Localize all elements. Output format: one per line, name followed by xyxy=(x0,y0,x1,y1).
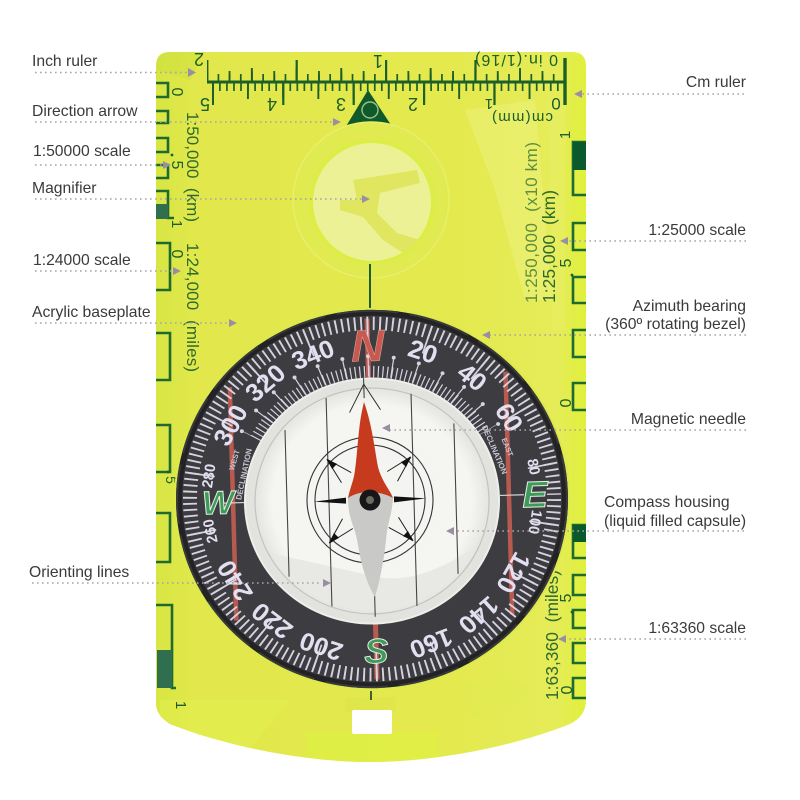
right map scales: 1:250,000, 1:25,000 and 1:63,360: 1:250,000 (x10 km) xyxy=(522,142,541,303)
cardinal letters: E xyxy=(522,473,549,515)
label: Direction arrow: Direction arrow xyxy=(32,103,138,120)
label: Cm ruler xyxy=(574,74,746,98)
label: 1:50000 scale xyxy=(33,143,171,169)
label: 1:50000 scale: 1:50000 scale xyxy=(33,143,131,160)
label: Magnifier: Magnifier xyxy=(32,180,97,197)
left map scales: 1:50,000 and 1:24,000: 1 xyxy=(168,220,185,228)
panel: acrylic baseplate xyxy=(156,52,586,762)
label: Acrylic baseplate: Acrylic baseplate xyxy=(32,304,151,321)
bezel degree numbers: 120 xyxy=(490,547,536,597)
bezel degree numbers: 220 xyxy=(247,596,298,644)
right map scales: 1:250,000, 1:25,000 and 1:63,360: 1:63,360 (miles) xyxy=(542,570,562,700)
inch ruler and cm ruler: 4 xyxy=(267,94,277,114)
inch ruler and cm ruler: 2 xyxy=(408,94,418,114)
inch ruler and cm ruler: 1 xyxy=(373,51,383,71)
label: 1:25000 scale: 1:25000 scale xyxy=(648,222,746,239)
bezel degree numbers: 60 xyxy=(489,399,528,437)
cardinal letters: S xyxy=(364,632,389,671)
label: Compass housing xyxy=(446,494,746,535)
notch xyxy=(352,710,392,734)
left map scales: 1:50,000 and 1:24,000: 5 xyxy=(163,476,179,484)
bezel degree numbers: 340 xyxy=(288,335,339,376)
right map scales: 1:250,000, 1:25,000 and 1:63,360: 5 xyxy=(558,258,575,267)
left map scales: 1:50,000 and 1:24,000: 5 xyxy=(168,161,185,170)
declination text: DECLINATION xyxy=(234,447,254,501)
compass rose xyxy=(304,376,435,565)
red declination lines xyxy=(228,315,514,683)
declination text: DECLINATION xyxy=(480,424,509,476)
bezel degree numbers: 240 xyxy=(212,555,259,605)
inch ruler and cm ruler: cm(mm) xyxy=(492,109,553,126)
left map scales: 1:50,000 and 1:24,000: 1:50,000 (km) xyxy=(183,112,202,222)
label: 1:24000 scale: 1:24000 scale xyxy=(33,252,131,269)
right map scales: 1:250,000, 1:25,000 and 1:63,360: 5 xyxy=(558,593,575,602)
inch ruler and cm ruler xyxy=(194,49,566,126)
cardinal letters: W xyxy=(202,485,237,522)
inch ruler and cm ruler: 1 xyxy=(485,95,493,112)
label: Magnetic needle: Magnetic needle xyxy=(631,411,746,428)
label: 1:25000 scale xyxy=(560,222,746,245)
right map scales: 1:250,000, 1:25,000 and 1:63,360: 1 xyxy=(557,131,574,139)
label: 1:24000 scale xyxy=(33,252,181,275)
declination text: EAST xyxy=(499,437,515,458)
declination text xyxy=(226,423,517,501)
label: Azimuth bearing: Azimuth bearing xyxy=(633,298,746,315)
label: 1:63360 scale xyxy=(558,620,746,643)
bezel degree numbers: 100 xyxy=(524,509,544,535)
label: Magnifier xyxy=(32,180,370,203)
label: Cm ruler: Cm ruler xyxy=(686,74,746,91)
declination text: WEST xyxy=(227,448,242,471)
bezel degree numbers: 80 xyxy=(523,458,542,476)
bezel degree numbers: 40 xyxy=(451,358,492,397)
icon: direction arrow xyxy=(345,90,393,138)
inch ruler and cm ruler: 0 xyxy=(551,94,561,113)
right map scales: 1:250,000, 1:25,000 and 1:63,360 xyxy=(522,131,586,700)
inch ruler and cm ruler: 2 xyxy=(194,49,204,69)
magnifier xyxy=(293,122,449,310)
label: Orienting lines xyxy=(29,564,331,587)
label: Acrylic baseplate xyxy=(32,304,237,327)
label: Orienting lines: Orienting lines xyxy=(29,564,129,581)
bezel degree numbers: 160 xyxy=(405,622,456,663)
cardinal letters: N xyxy=(350,320,386,371)
inch ruler and cm ruler: 5 xyxy=(200,94,210,114)
label: 1:63360 scale: 1:63360 scale xyxy=(648,620,746,637)
left map scales: 1:50,000 and 1:24,000 xyxy=(156,83,202,709)
left map scales: 1:50,000 and 1:24,000: 1:24,000 (miles) xyxy=(183,243,202,372)
degree ticks xyxy=(185,318,559,680)
left map scales: 1:50,000 and 1:24,000: 0 xyxy=(168,250,185,259)
right map scales: 1:250,000, 1:25,000 and 1:63,360: 0 xyxy=(558,398,575,407)
left map scales: 1:50,000 and 1:24,000: 1 xyxy=(172,701,189,709)
north arrow marker xyxy=(349,378,381,413)
bezel degree numbers: 20 xyxy=(404,335,441,370)
label: Magnetic needle xyxy=(382,411,746,432)
label: Inch ruler xyxy=(32,53,196,77)
inch ruler and cm ruler: 3 xyxy=(336,94,346,114)
compass housing: liquid filled capsule xyxy=(242,375,502,627)
right map scales: 1:250,000, 1:25,000 and 1:63,360: 0 xyxy=(559,685,576,694)
label: Azimuth bearing: (360º rotating bezel) xyxy=(605,316,746,333)
icon: magnetic needle xyxy=(348,402,393,597)
bezel degree numbers: 280 xyxy=(200,463,220,489)
orienting lines xyxy=(284,393,459,619)
bezel degree numbers: 260 xyxy=(201,518,222,544)
compass: rotating bezel xyxy=(169,302,575,696)
label: Direction arrow xyxy=(32,103,341,126)
bezel degree numbers: 140 xyxy=(453,590,504,639)
bezel degree numbers xyxy=(196,329,548,669)
bezel degree numbers: 200 xyxy=(296,626,346,665)
bezel degree numbers: 320 xyxy=(240,359,291,408)
label: Azimuth bearing xyxy=(482,298,746,339)
cardinal letters xyxy=(197,316,554,676)
bezel degree numbers: 300 xyxy=(208,401,254,451)
left map scales: 1:50,000 and 1:24,000: 0 xyxy=(168,88,185,97)
label: Inch ruler: Inch ruler xyxy=(32,53,97,70)
label: Compass housing: (liquid filled capsule) xyxy=(604,513,746,530)
inch ruler and cm ruler: 0 in.(1/16) xyxy=(475,51,558,68)
label: Compass housing: Compass housing xyxy=(604,494,730,511)
right map scales: 1:250,000, 1:25,000 and 1:63,360: 1:25,000 (km) xyxy=(539,190,559,303)
